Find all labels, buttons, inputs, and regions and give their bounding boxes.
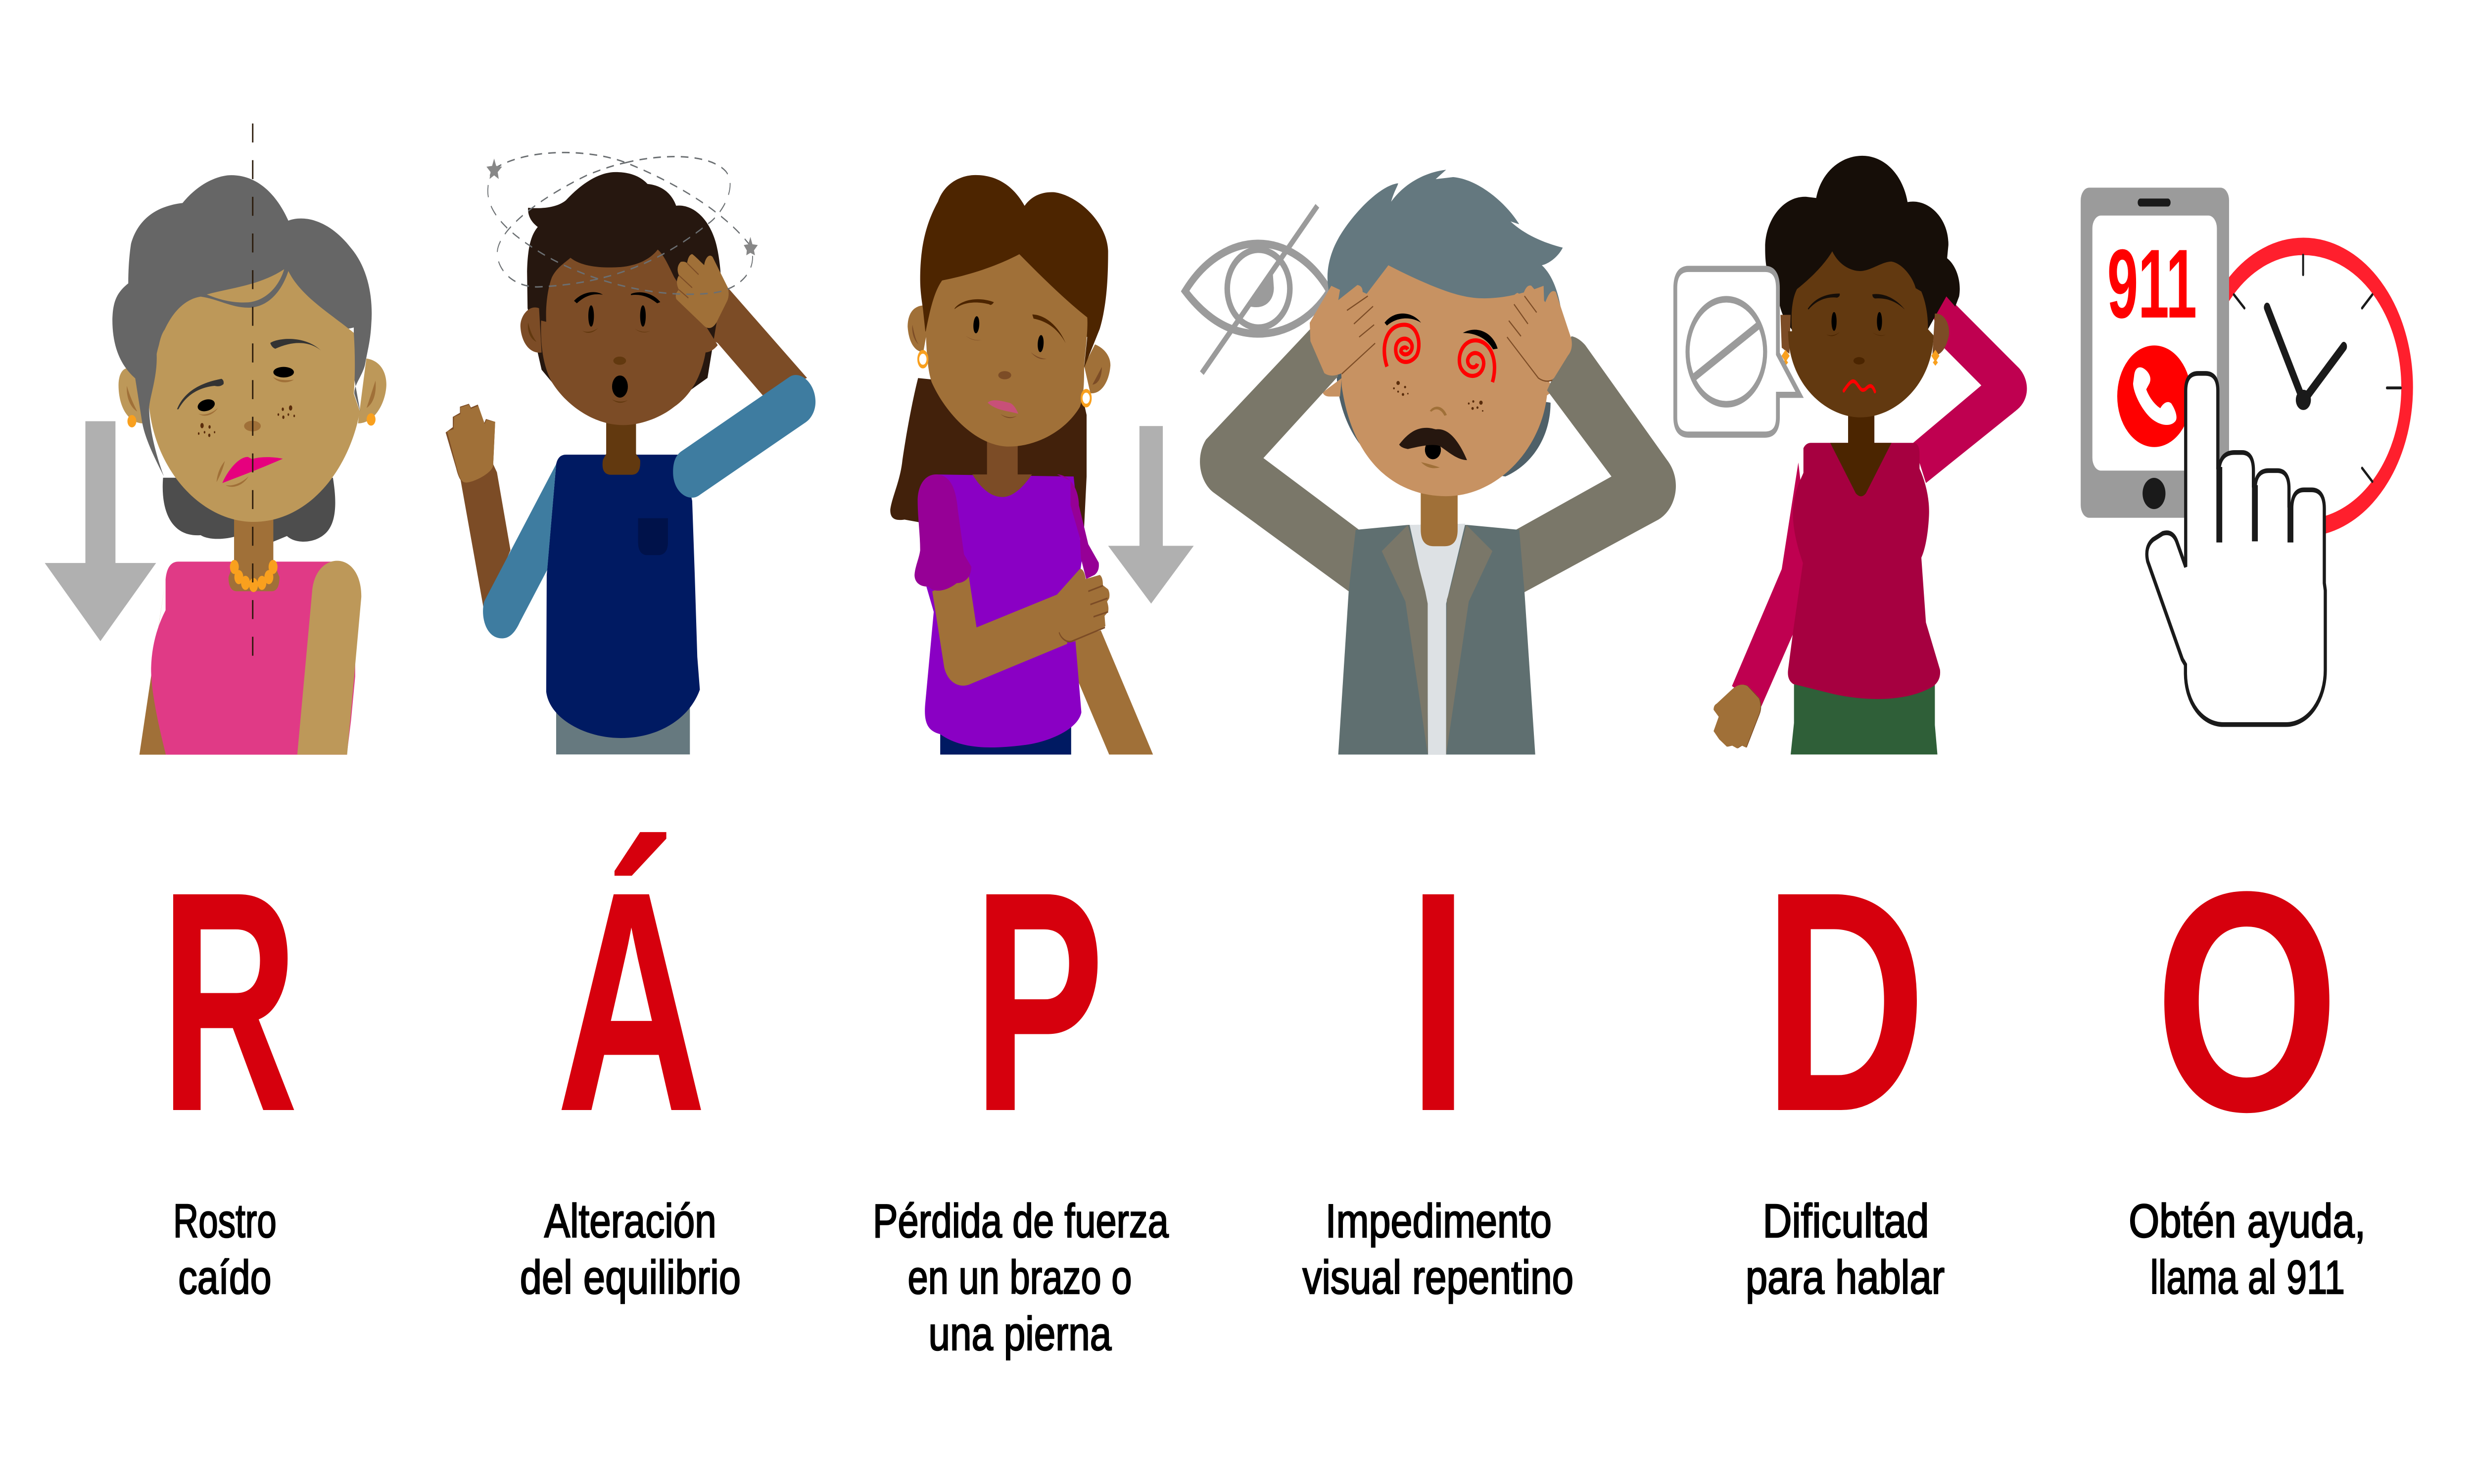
- sleeves: [914, 474, 1099, 591]
- word: RÁPIDO: [160, 826, 2339, 1177]
- label: Pérdida de fuerza en un brazo o una pierna: en un brazo o: [908, 1251, 1132, 1304]
- letter Á: Á: [556, 826, 707, 1176]
- wavy mouth: [1844, 381, 1875, 392]
- label: Pérdida de fuerza en un brazo o una pierna: Pérdida de fuerza: [873, 1194, 1169, 1248]
- letter R: R: [160, 827, 298, 1177]
- face: [1340, 265, 1547, 496]
- figure: loss of balance boy: [446, 152, 815, 754]
- eye icon crossed out: [1185, 206, 1330, 373]
- lips: [988, 400, 1018, 414]
- figure: arm weakness woman: [890, 175, 1194, 754]
- skirt: [1791, 680, 1938, 754]
- arrow: down left: [45, 421, 156, 641]
- eyes: [973, 315, 1045, 353]
- hair: [527, 172, 721, 394]
- back hair: [163, 478, 335, 542]
- nose: [1854, 357, 1865, 365]
- eyebrows: [954, 299, 1066, 343]
- shirt: [546, 455, 700, 738]
- right forearm: [708, 288, 807, 396]
- label: Dificultad para hablar: Dificultad: [1762, 1194, 1929, 1248]
- freckles: [1393, 381, 1483, 412]
- dress: [151, 561, 355, 755]
- ears: [907, 306, 1110, 393]
- face: [1788, 251, 1934, 417]
- hair: [920, 175, 1108, 368]
- neck: [1830, 413, 1892, 496]
- face: [541, 250, 708, 425]
- pants: [556, 698, 690, 754]
- eyes: [1831, 312, 1882, 331]
- figure: phone, clock and hand calling 911: [2081, 187, 2407, 725]
- sleeves: [1200, 329, 1676, 592]
- hanging arm: [1075, 630, 1153, 754]
- ears: [119, 359, 386, 427]
- letter D: D: [1763, 827, 1926, 1177]
- left sleeve: [483, 464, 556, 639]
- hair: [1328, 170, 1563, 345]
- label: Impedimento visual repentino: Impedimento: [1326, 1194, 1552, 1248]
- earrings: [1781, 350, 1940, 366]
- phone: [2081, 187, 2229, 518]
- mouth: [1425, 440, 1441, 459]
- mouth: [612, 375, 628, 398]
- eyebrows: [574, 292, 660, 303]
- left hand: [1310, 285, 1375, 375]
- eyes: [588, 305, 646, 326]
- jacket: [1338, 525, 1535, 754]
- 911 number: 911: [2107, 229, 2197, 338]
- label: Rostro caído: [173, 1194, 277, 1304]
- right hand on forehead: [676, 254, 729, 328]
- eyes: [197, 367, 294, 413]
- neck: [603, 419, 640, 475]
- face: [926, 254, 1088, 447]
- label: Dificultad para hablar: [1746, 1194, 1945, 1304]
- pants: [940, 723, 1071, 754]
- dizzy orbits: [488, 152, 753, 294]
- figure: sudden vision impairment man: [1185, 170, 1676, 754]
- spiral eyes: [1384, 325, 1494, 382]
- label: Impedimento visual repentino: [1302, 1194, 1573, 1304]
- eyebrows: [1384, 314, 1498, 349]
- arrow: down right: [1108, 426, 1194, 603]
- lapels: [1382, 525, 1492, 754]
- nose: [244, 421, 261, 431]
- right sleeve: [673, 375, 815, 498]
- nose: [1430, 407, 1447, 416]
- label: Alteración del equilibrio: [520, 1194, 741, 1304]
- clock: [2199, 246, 2407, 528]
- back hair: [890, 378, 1087, 528]
- left hand: [446, 404, 495, 482]
- nose: [999, 371, 1011, 379]
- hand: [1713, 685, 1761, 748]
- dashed symmetry line: [251, 107, 254, 656]
- label: Dificultad para hablar: para hablar: [1746, 1251, 1945, 1304]
- label: Alteración del equilibrio: Alteración: [544, 1194, 716, 1248]
- hair: [112, 175, 372, 476]
- right hand: [1507, 285, 1572, 381]
- label: Pérdida de fuerza en un brazo o una pierna: [873, 1194, 1169, 1360]
- folded arm: [932, 575, 1067, 686]
- label: Obtén ayuda, llama al 911: [2129, 1194, 2366, 1304]
- label: Alteración del equilibrio: del equilibrio: [520, 1251, 741, 1304]
- label: Obtén ayuda, llama al 911: Obtén ayuda,: [2129, 1194, 2366, 1248]
- nose: [614, 357, 626, 365]
- label: Rostro caído: Rostro: [173, 1194, 277, 1248]
- speech bubble with prohibition sign: [1675, 269, 1800, 435]
- ears: [521, 307, 718, 353]
- raised sleeve: [1913, 295, 2027, 483]
- figure: speech difficulty woman: [1675, 156, 2027, 754]
- ears: [1780, 314, 1949, 356]
- freckles: [198, 405, 295, 437]
- hair: [1765, 156, 1960, 331]
- shirt: [925, 474, 1082, 747]
- shirt: [1410, 524, 1465, 754]
- earrings: [918, 352, 1091, 406]
- stars: [486, 158, 758, 255]
- blouse: [1788, 443, 1940, 699]
- call button: [2117, 345, 2191, 447]
- figure: drooping face woman: [45, 107, 386, 755]
- label: Pérdida de fuerza en un brazo o una pierna: una pierna: [928, 1307, 1111, 1360]
- neck: [229, 513, 280, 591]
- pocket: [638, 518, 668, 555]
- lips: [222, 457, 283, 483]
- pointing hand: [2147, 373, 2325, 725]
- ears: [1323, 378, 1554, 397]
- arm: [297, 561, 361, 755]
- lower hair: [1336, 370, 1551, 476]
- letter P: P: [973, 827, 1104, 1177]
- letter I: I: [1408, 826, 1469, 1177]
- label: Impedimento visual repentino: visual repentino: [1302, 1251, 1573, 1304]
- letter O: O: [2154, 827, 2339, 1177]
- label: Obtén ayuda, llama al 911: llama al 911: [2150, 1251, 2345, 1304]
- necklace: [230, 560, 278, 592]
- neck: [972, 435, 1032, 497]
- hand on arm: [1057, 569, 1109, 642]
- label: Rostro caído: caído: [178, 1251, 272, 1304]
- mustache: [1399, 428, 1467, 460]
- hanging sleeve: [1732, 463, 1808, 706]
- left forearm: [460, 464, 511, 612]
- face: [149, 271, 360, 522]
- eyebrows: [1808, 293, 1905, 310]
- eyebrows: [177, 339, 321, 409]
- neck: [1421, 489, 1458, 546]
